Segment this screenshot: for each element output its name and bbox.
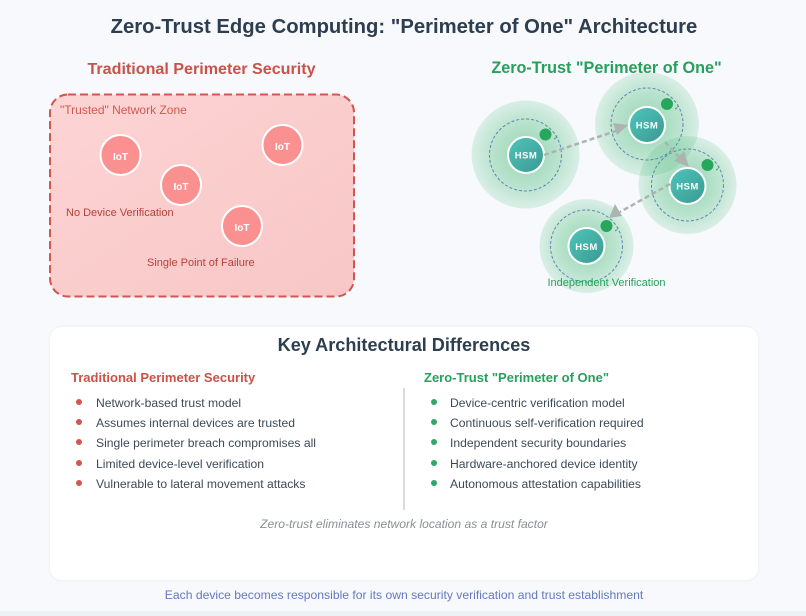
zone 2	[595, 72, 699, 176]
title: Zero-Trust Edge Computing: "Perimeter of One" Architecture	[111, 16, 697, 38]
IoT device 3: IoT	[275, 142, 290, 153]
arrow: zone 1 to zone 2	[544, 123, 628, 155]
panel heading: Key Architectural Differences	[278, 335, 530, 355]
column: traditional: Network-based trust model	[96, 396, 241, 410]
zone 2: HSM	[636, 120, 658, 132]
column heading: Zero-Trust "Perimeter of One"	[424, 370, 609, 385]
footer caption: Each device becomes responsible for its own security verification and trust establishment	[165, 588, 643, 602]
label: independent verification: Independent Verification	[547, 277, 666, 289]
heading: zero-trust: Zero-Trust "Perimeter of One"	[491, 59, 722, 77]
column: zero-trust: Autonomous attestation capabilities	[450, 477, 641, 491]
bottom band	[0, 611, 806, 616]
IoT device 4: IoT	[234, 223, 250, 234]
column: traditional: Single perimeter breach compromises all	[96, 436, 316, 450]
arrow: zone 2 to zone 3	[665, 142, 689, 167]
column: zero-trust	[424, 370, 644, 491]
zone 3: ✓	[715, 165, 721, 173]
column: zero-trust: Continuous self-verification required	[450, 416, 644, 430]
column: traditional: Limited device-level verification	[96, 457, 264, 471]
column: traditional	[71, 370, 316, 491]
diagram: both architectures	[49, 59, 736, 298]
zone label: "Trusted" Network Zone	[60, 103, 187, 117]
zone 4	[540, 199, 634, 293]
column: traditional: Assumes internal devices are trusted	[96, 416, 295, 430]
panel: zero-trust perimeter of one	[472, 59, 736, 293]
zone 1: HSM	[515, 150, 537, 162]
IoT device 2	[161, 165, 201, 205]
label: no device verification: No Device Verification	[66, 207, 174, 219]
column: zero-trust: Independent security boundaries	[450, 436, 626, 450]
zone 1: ✓	[553, 134, 559, 142]
zone 3	[638, 136, 736, 234]
column heading: Traditional Perimeter Security	[71, 370, 255, 385]
IoT device 1: IoT	[113, 152, 128, 163]
zone 1	[472, 100, 580, 208]
zone 4: ✓	[614, 226, 620, 234]
trusted zone box	[50, 94, 354, 296]
arrow: zone 3 to zone 4	[609, 184, 670, 218]
zone 4: HSM	[575, 242, 598, 253]
column: zero-trust: Hardware-anchored device identity	[450, 457, 638, 471]
zone 3: HSM	[676, 182, 699, 192]
panel: traditional perimeter	[50, 60, 354, 296]
zone 2: ✓	[674, 104, 680, 112]
column: zero-trust: Device-centric verification model	[450, 396, 625, 410]
panel: key architectural differences	[50, 327, 758, 580]
heading: traditional: Traditional Perimeter Security	[87, 60, 316, 78]
IoT device 3	[262, 125, 302, 165]
IoT device 2: IoT	[174, 182, 188, 193]
column: traditional: Vulnerable to lateral movement attacks	[96, 477, 305, 491]
note: Zero-trust eliminates network location as a trust factor	[260, 517, 548, 531]
IoT device 4	[222, 206, 262, 246]
IoT device 1	[100, 135, 140, 175]
label: single point of failure: Single Point of Failure	[147, 257, 255, 269]
